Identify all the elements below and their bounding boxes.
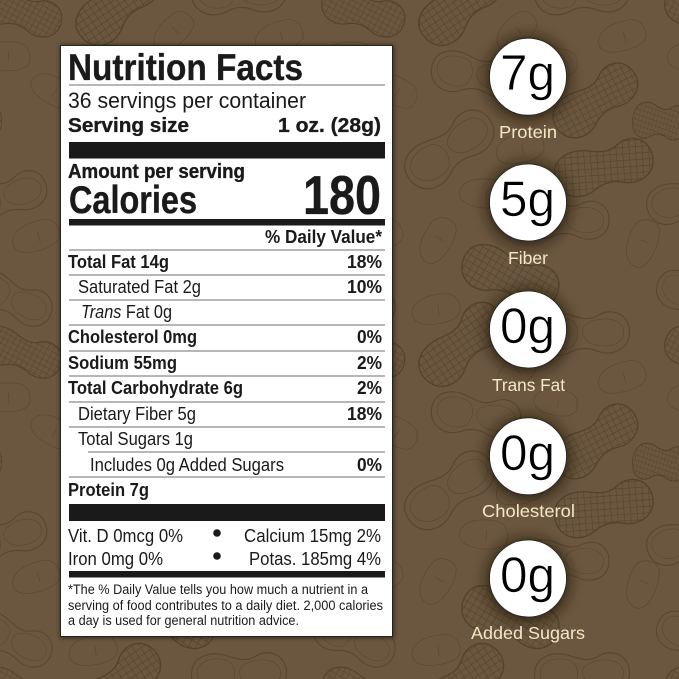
row: protein: Protein 7g: [68, 480, 149, 500]
row: dietary fiber: 18%: [347, 404, 382, 424]
row: total carbohydrate: 2%: [357, 378, 382, 398]
row: dietary fiber: Dietary Fiber 5g: [78, 404, 196, 424]
footnote: a day is used for general nutrition advice.: [68, 613, 299, 628]
row: added sugars: 0%: [357, 455, 382, 475]
text: serving size: Serving size: [68, 115, 189, 137]
row: total sugars: Total Sugars 1g: [78, 429, 193, 449]
stat: 0g trans fat: 0g: [500, 298, 555, 354]
stat: 5g fiber: 5g: [500, 171, 555, 227]
heading: Nutrition Facts: Nutrition Facts: [68, 47, 303, 88]
row: iron and potassium: [68, 549, 381, 569]
row: vitamin d and calcium: [68, 526, 381, 546]
stat: 0g cholesterol: Cholesterol: [482, 501, 575, 521]
stat: 0g added sugars: 0g: [500, 547, 555, 603]
stat: 0g trans fat: [487, 290, 569, 395]
text: serving size value: 1 oz. (28g): [278, 115, 381, 137]
stat: 7g protein: Protein: [499, 122, 557, 142]
row: total fat: Total Fat 14g: [68, 252, 169, 272]
row: total carbohydrate: [68, 378, 382, 398]
row: total carbohydrate: Total Carbohydrate 6g: [68, 378, 243, 398]
stat: 0g added sugars: [471, 539, 585, 643]
footnote: *The % Daily Value tells you how much a nutrient in a: [68, 582, 368, 597]
row: cholesterol: [68, 327, 382, 347]
row: added sugars: Includes 0g Added Sugars: [90, 455, 284, 475]
stat: 0g cholesterol: [482, 417, 575, 521]
panel: nutrition facts label: [60, 46, 392, 636]
row: vitamin d and calcium: Calcium 15mg 2%: [244, 526, 381, 546]
stat: 5g fiber: [487, 163, 569, 268]
row: saturated fat: [78, 277, 382, 297]
row: saturated fat: Saturated Fat 2g: [78, 277, 201, 297]
row: vitamin d and calcium: Vit. D 0mcg 0%: [68, 526, 183, 546]
row: trans fat: Trans Fat 0g: [81, 302, 172, 322]
row: sodium: [68, 353, 382, 373]
row: dietary fiber: [78, 404, 382, 424]
stat: 7g protein: 7g: [500, 45, 555, 101]
row: saturated fat: 10%: [347, 277, 382, 297]
row: cholesterol: 0%: [357, 327, 382, 347]
text: amount per serving: Amount per serving: [68, 161, 245, 183]
stat: 0g trans fat: Trans Fat: [492, 375, 565, 395]
row: cholesterol: Cholesterol 0mg: [68, 327, 197, 347]
stat: 7g protein: [487, 37, 569, 142]
row: total fat: 18%: [347, 252, 382, 272]
row: iron and potassium: Iron 0mg 0%: [68, 549, 163, 569]
number: 180 calories: 180: [303, 164, 381, 226]
text: daily value header: % Daily Value*: [265, 227, 382, 247]
row: total fat: [68, 252, 382, 272]
text: servings per container: 36 servings per container: [68, 88, 306, 113]
text: calories: Calories: [69, 179, 197, 222]
stat: 5g fiber: Fiber: [508, 248, 548, 268]
stat: 0g cholesterol: 0g: [500, 425, 555, 481]
footnote: [68, 582, 383, 628]
footnote: serving of food contributes to a daily diet. 2,000 calories: [68, 598, 383, 613]
row: sodium: 2%: [357, 353, 382, 373]
row: sodium: Sodium 55mg: [68, 353, 177, 373]
row: iron and potassium: Potas. 185mg 4%: [249, 549, 381, 569]
stat: 0g added sugars: Added Sugars: [471, 623, 585, 643]
